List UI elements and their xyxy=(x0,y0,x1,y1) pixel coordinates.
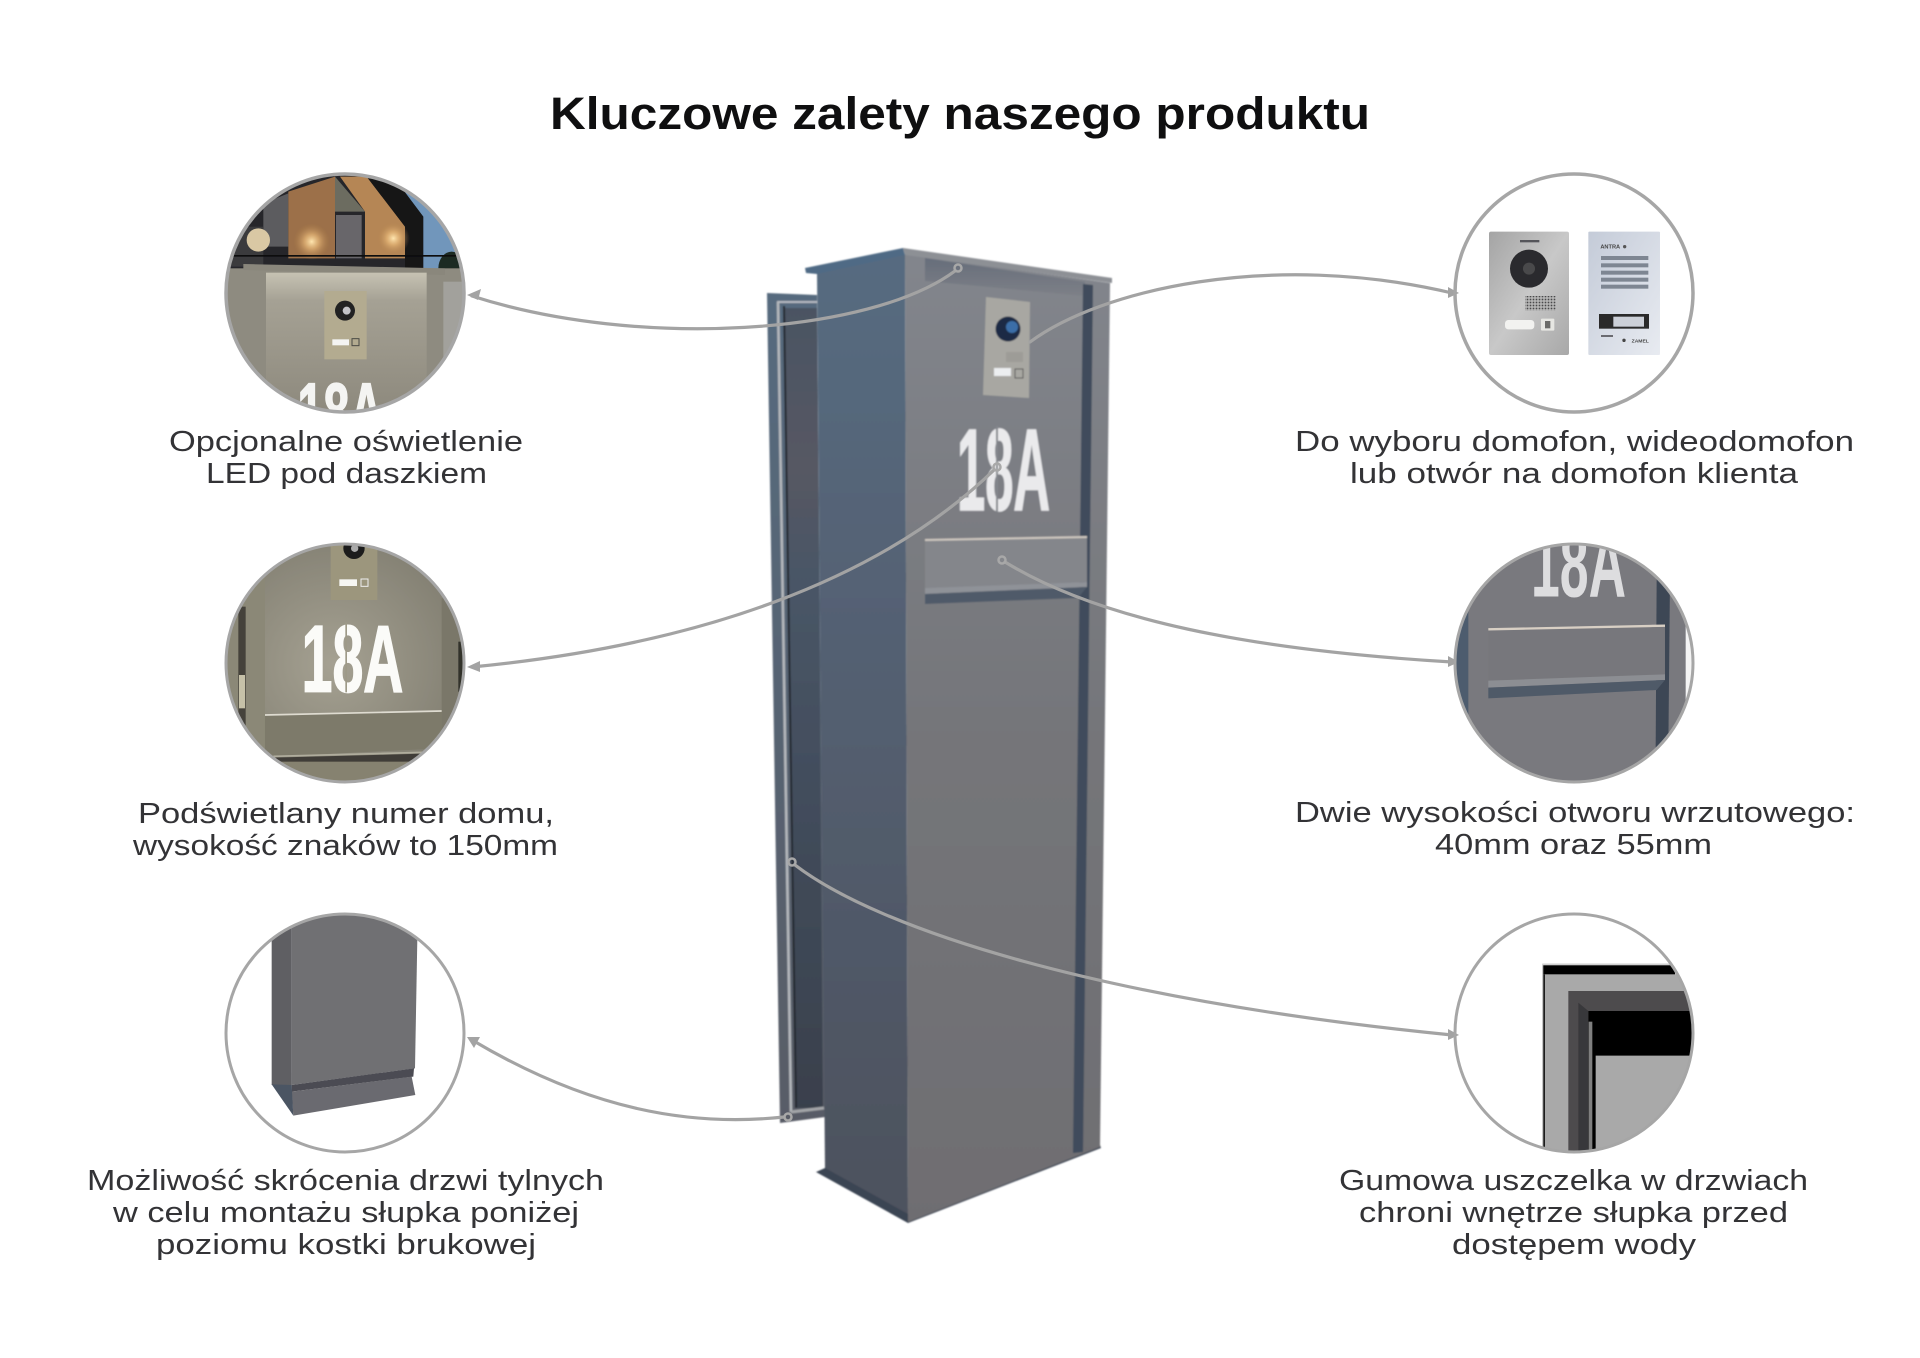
pillar side face xyxy=(817,254,908,1222)
text: shortened rear door xyxy=(87,1165,604,1261)
product: mailbox pillar xyxy=(767,248,1112,1223)
product: mailbox pillar: 18A xyxy=(957,405,1050,535)
arrow: mail slot xyxy=(1005,562,1452,662)
house number on pillar xyxy=(957,405,1050,535)
arrow: house number xyxy=(472,470,994,667)
text: LED lighting xyxy=(169,426,523,490)
text: shortened rear door: Możliwość skrócenia drzwi tylnych xyxy=(87,1165,604,1197)
roof xyxy=(805,248,1112,283)
text: mail slot xyxy=(1295,797,1855,861)
text: illuminated number xyxy=(132,798,558,862)
ring xyxy=(1455,174,1693,412)
detail circle: mail slot: 18A xyxy=(1531,512,1626,618)
text: rubber door seal xyxy=(1339,1165,1808,1261)
text: intercom choices xyxy=(1295,426,1854,490)
pillar front face xyxy=(905,254,1110,1222)
text: intercom choices: lub otwór na domofon klienta xyxy=(1350,458,1799,490)
ring xyxy=(1455,914,1693,1152)
arrow: LED lighting xyxy=(472,271,955,329)
audio intercom panel: ANTRA xyxy=(1600,245,1620,251)
text: intercom choices: Do wyboru domofon, wideodomofon xyxy=(1295,426,1854,458)
detail circle: rubber door seal xyxy=(1542,964,1692,1150)
right groove xyxy=(1073,284,1093,1153)
ring xyxy=(1455,544,1693,782)
detail circle: shortened rear door xyxy=(272,912,417,1116)
text: shortened rear door: poziomu kostki brukowej xyxy=(156,1229,536,1261)
intercom panel on pillar xyxy=(983,297,1030,398)
text: illuminated number: wysokość znaków to 150mm xyxy=(132,830,558,862)
detail circle: intercom choices xyxy=(1489,232,1660,355)
ring xyxy=(226,174,464,412)
text: mail slot: Dwie wysokości otworu wrzutowego: xyxy=(1295,797,1855,829)
text: rubber door seal: Gumowa uszczelka w drzwiach xyxy=(1339,1165,1808,1197)
mail slot on pillar xyxy=(925,537,1087,604)
callout lines xyxy=(472,271,1452,1120)
text: rubber door seal: dostępem wody xyxy=(1452,1229,1697,1261)
audio intercom panel: ZAMEL xyxy=(1632,338,1649,344)
arrow: intercom xyxy=(1030,275,1452,342)
text: LED lighting: LED pod daszkiem xyxy=(206,458,487,490)
arrow: shortened rear door xyxy=(472,1040,784,1120)
detail circle: LED lighting: 18A xyxy=(297,366,383,455)
audio intercom panel xyxy=(1588,232,1660,355)
text: mail slot: 40mm oraz 55mm xyxy=(1435,829,1712,861)
open rear door xyxy=(767,293,825,1123)
detail circle: illuminated number xyxy=(228,546,462,780)
title: Kluczowe zalety naszego produktu xyxy=(550,88,1370,139)
detail circle: mail slot xyxy=(1456,546,1692,780)
pillar base plate xyxy=(816,1145,1101,1223)
text: rubber door seal: chroni wnętrze słupka przed xyxy=(1359,1197,1788,1229)
text: LED lighting: Opcjonalne oświetlenie xyxy=(169,426,523,458)
video intercom panel xyxy=(1489,232,1569,355)
detail circle: LED lighting xyxy=(228,176,462,410)
under-roof shadow band xyxy=(925,258,1085,296)
ring xyxy=(226,544,464,782)
text: illuminated number: Podświetlany numer domu, xyxy=(138,798,554,830)
infographic canvas xyxy=(90,96,1852,1260)
arrow: door seal xyxy=(795,865,1452,1035)
text: shortened rear door: w celu montażu słupka poniżej xyxy=(112,1197,579,1229)
ring xyxy=(226,914,464,1152)
detail circle: illuminated number: 18A xyxy=(302,607,403,713)
callout dots and arrowheads xyxy=(467,264,1459,1120)
